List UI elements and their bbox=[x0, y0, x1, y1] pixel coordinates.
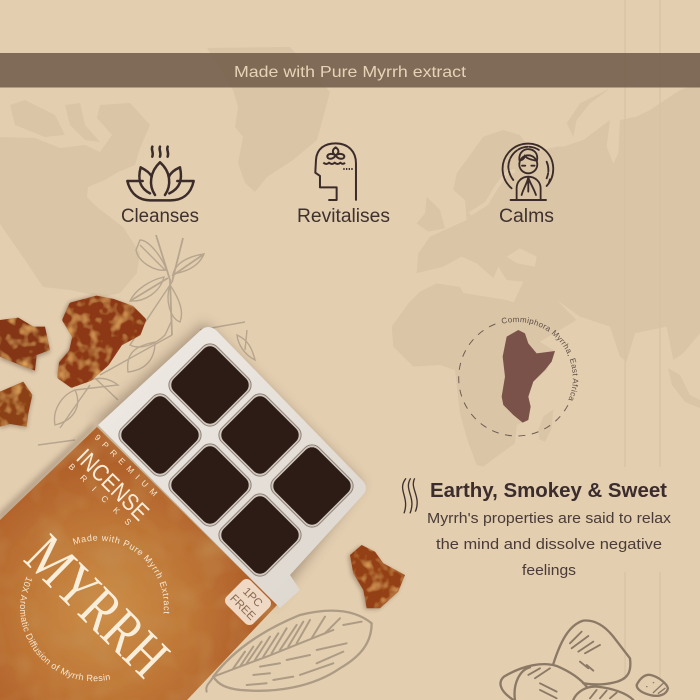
body text: Myrrh's properties are said to relax bbox=[427, 510, 672, 527]
badge: 1pc free bbox=[223, 577, 273, 627]
brick 6 bbox=[215, 490, 305, 580]
region shape: east africa bbox=[502, 330, 555, 423]
box circular text: made with: Made with Pure Myrrh Extract bbox=[72, 534, 170, 614]
icon: steam waves bbox=[403, 478, 417, 513]
icon: head with lotus bbox=[315, 143, 356, 201]
botanical sketch: top plant bbox=[38, 235, 255, 445]
resin: lower left piece bbox=[0, 382, 32, 428]
badge: 1pc free: 1PC bbox=[240, 586, 264, 610]
map: british isles bbox=[417, 197, 445, 232]
product: incense tray bbox=[94, 322, 366, 608]
benefit: cleanses bbox=[121, 147, 199, 227]
label: cleanses: Cleanses bbox=[121, 206, 199, 227]
brick 4 bbox=[165, 440, 255, 530]
botanical sketch: stones bbox=[500, 621, 668, 700]
label: revitalises: Revitalises bbox=[297, 206, 390, 227]
world map background bbox=[0, 47, 700, 467]
map: greenland bbox=[207, 47, 330, 192]
label: calms: Calms bbox=[499, 206, 554, 227]
body text: feelings bbox=[522, 562, 576, 579]
box text: bricks: BRICKS bbox=[67, 461, 134, 528]
body text bbox=[427, 510, 672, 579]
product: orange box sleeve bbox=[0, 422, 277, 700]
botanical sketch: bottom leaf bbox=[206, 611, 372, 692]
box text: incense: INCENSE bbox=[71, 444, 154, 526]
badge: 1pc free: FREE bbox=[227, 593, 258, 623]
icon: lotus with steam bbox=[127, 147, 194, 200]
map: south-east asia islands bbox=[668, 368, 700, 408]
brick 1 bbox=[165, 340, 255, 430]
heading: earthy, smokey and sweet: Earthy, Smokey & Sweet bbox=[430, 480, 667, 502]
faint vertical lines bbox=[625, 0, 660, 680]
map: eurasia bbox=[417, 83, 700, 362]
map: arctic sliver bbox=[567, 88, 610, 137]
resin: right piece bbox=[348, 545, 405, 609]
resin: left piece bbox=[0, 318, 50, 373]
circular label: Commiphora Myrrha, East Africa bbox=[502, 317, 578, 400]
body text: the mind and dissolve negative bbox=[436, 536, 662, 553]
map: africa bbox=[392, 283, 555, 467]
east africa locator bbox=[458, 317, 578, 436]
map: arctic islands bbox=[10, 100, 100, 142]
box circular text: diffusion: 10X Aromatic Diffusion of Myrrh Resin bbox=[20, 576, 110, 682]
band text: Made with Pure Myrrh extract bbox=[234, 64, 467, 81]
top band bbox=[0, 53, 700, 88]
dashed circle bbox=[459, 323, 568, 436]
brick 2 bbox=[115, 390, 205, 480]
box text: premium: 9PREMIUM bbox=[93, 432, 160, 498]
brick 3 bbox=[215, 390, 305, 480]
brick 5 bbox=[267, 441, 357, 531]
icon: meditating person bbox=[503, 144, 553, 200]
benefit: revitalises bbox=[297, 143, 390, 227]
map: north america bbox=[0, 103, 150, 297]
map: inland seas bbox=[470, 171, 537, 267]
benefit: calms bbox=[499, 144, 554, 227]
resin: large piece bbox=[57, 296, 143, 385]
